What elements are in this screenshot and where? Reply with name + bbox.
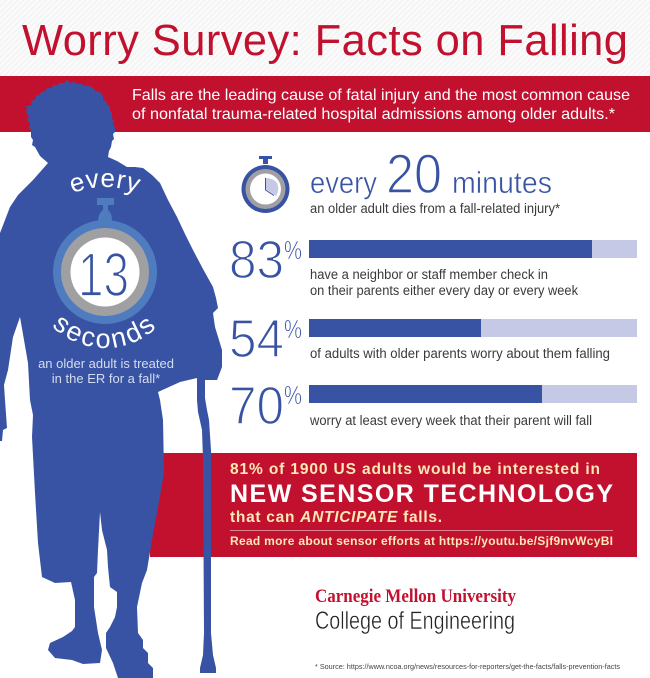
stat: 83 percent: % (284, 235, 302, 265)
stat: 83 percent (229, 230, 637, 298)
stat: every 20 minutes: 20 (386, 142, 442, 205)
banner text: Falls are the leading cause of fatal injury and the most common cause (132, 87, 630, 104)
number 13: 13 (78, 241, 129, 310)
source footnote: * Source: https://www.ncoa.org/news/resources-for-reporters/get-the-facts/falls-prevention-facts (315, 662, 620, 671)
stat: 54 percent (229, 309, 637, 369)
title: Worry Survey: Facts on Falling (22, 17, 628, 65)
banner text: of nonfatal trauma-related hospital admissions among older adults.* (132, 106, 615, 123)
stat: 54 percent: of adults with older parents worry about them falling (310, 346, 610, 361)
stat: 83 percent: have a neighbor or staff member check in (310, 267, 548, 282)
bottom red panel (150, 453, 637, 557)
stopwatch crown (97, 198, 114, 222)
bar 83 percent (309, 240, 637, 258)
panel headline line one: 81% of 1900 US adults would be interested in (230, 461, 600, 478)
curved word seconds: seconds (54, 318, 154, 348)
bar 54 percent (309, 319, 637, 337)
university logo (315, 587, 517, 635)
stat: 70 percent (229, 376, 637, 436)
stat: every 20 minutes: an older adult dies from a fall-related injury* (310, 201, 561, 216)
stat: 70 percent: % (284, 380, 302, 410)
stat: every 20 minutes (310, 142, 561, 216)
bar 70 percent (309, 385, 637, 403)
panel headline emphasis: NEW SENSOR TECHNOLOGY (230, 480, 613, 508)
university logo: College of Engineering (315, 607, 515, 635)
stat: 83 percent: 83 (229, 230, 284, 290)
panel headline line three: that can ANTICIPATE falls. (230, 509, 442, 526)
stat: 70 percent: 70 (229, 376, 284, 436)
stat: 70 percent: worry at least every week that their parent will fall (309, 413, 592, 428)
curved word every: every (71, 173, 141, 196)
silhouette of older adult with cane (0, 80, 222, 678)
stat: every 20 minutes: minutes (452, 165, 552, 200)
small stopwatch icon (242, 156, 290, 213)
stat: 54 percent: 54 (229, 309, 284, 369)
university logo: Carnegie Mellon University (315, 587, 517, 607)
stat: 54 percent: % (284, 314, 302, 344)
stat: every 20 minutes: every (310, 165, 377, 200)
er caption: in the ER for a fall* (52, 371, 160, 386)
large stopwatch on body (53, 198, 157, 324)
er caption: an older adult is treated (38, 356, 174, 371)
panel link line: Read more about sensor efforts at https://youtu.be/Sjf9nvWcyBI (230, 534, 613, 548)
top red banner (0, 76, 650, 132)
stat: 83 percent: on their parents either every day or every week (310, 283, 578, 298)
